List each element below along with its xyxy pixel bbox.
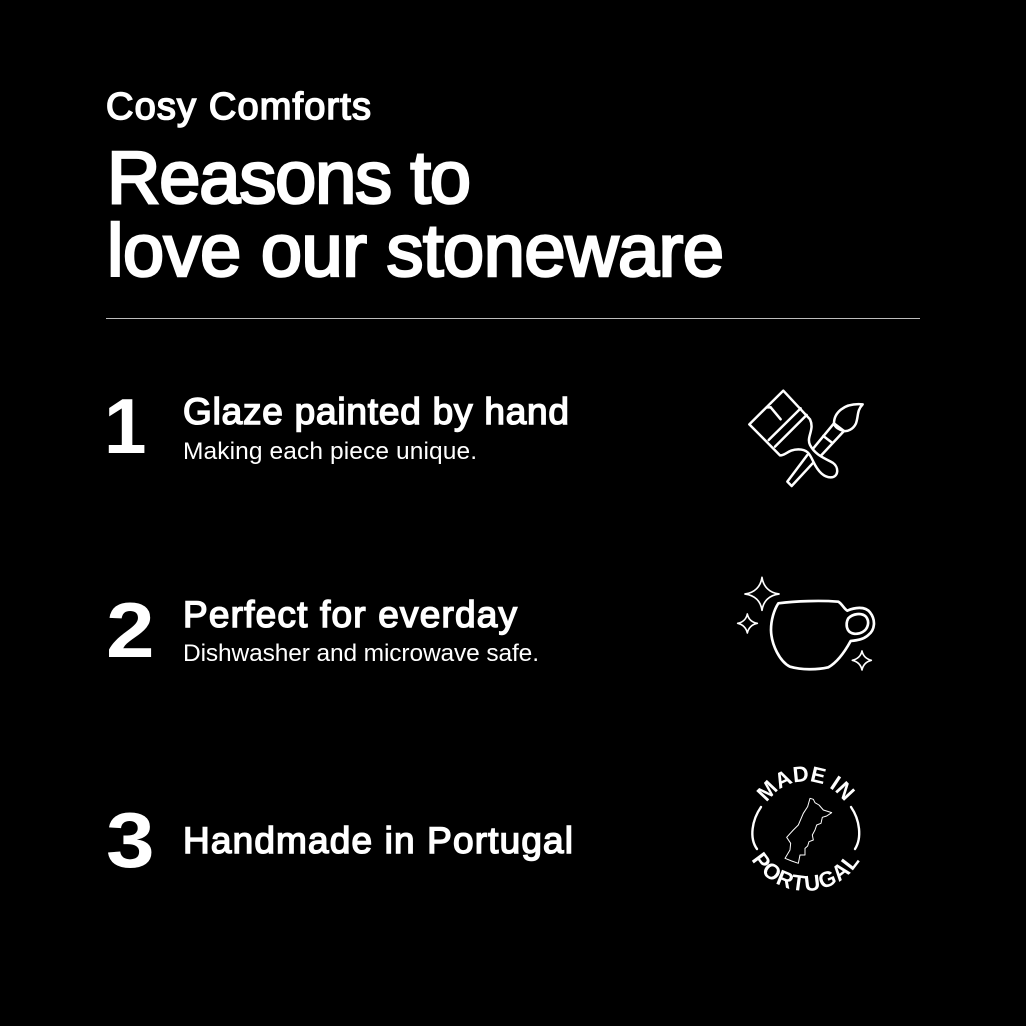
- sparkles: [738, 577, 871, 670]
- icon: cup with sparkles: [738, 577, 874, 670]
- number 2: 2: [106, 586, 155, 674]
- heading: Glaze painted by hand: Glaze painted by hand: [183, 391, 569, 432]
- badge text: MADE IN: [756, 766, 856, 802]
- icon: map of Portugal: [785, 798, 832, 863]
- eyebrow: Cosy Comforts: Cosy Comforts: [106, 86, 371, 128]
- badge ring: [752, 807, 859, 849]
- badge: made in Portugal: [751, 766, 860, 891]
- text: Making each piece unique: Making each piece unique.: [183, 438, 477, 465]
- heading: Perfect for everday: Perfect for everday: [183, 594, 518, 635]
- cup handle: [847, 614, 868, 634]
- number 1: 1: [104, 383, 147, 470]
- cup: [771, 601, 874, 669]
- title: Reasons to: [107, 136, 471, 219]
- number 3: 3: [106, 796, 155, 884]
- badge text: PORTUGAL: [752, 852, 860, 891]
- reason 2: [106, 586, 539, 674]
- title: [107, 136, 724, 292]
- heading: Handmade in Portugal: Handmade in Portugal: [183, 820, 573, 861]
- badge text: [752, 766, 860, 891]
- text: Dishwasher and microwave safe: Dishwasher and microwave safe.: [183, 640, 539, 667]
- reason 3: [106, 796, 573, 884]
- reason 1: [104, 383, 569, 470]
- icon: paint brushes: [749, 391, 863, 486]
- title: love our stoneware: [107, 209, 724, 292]
